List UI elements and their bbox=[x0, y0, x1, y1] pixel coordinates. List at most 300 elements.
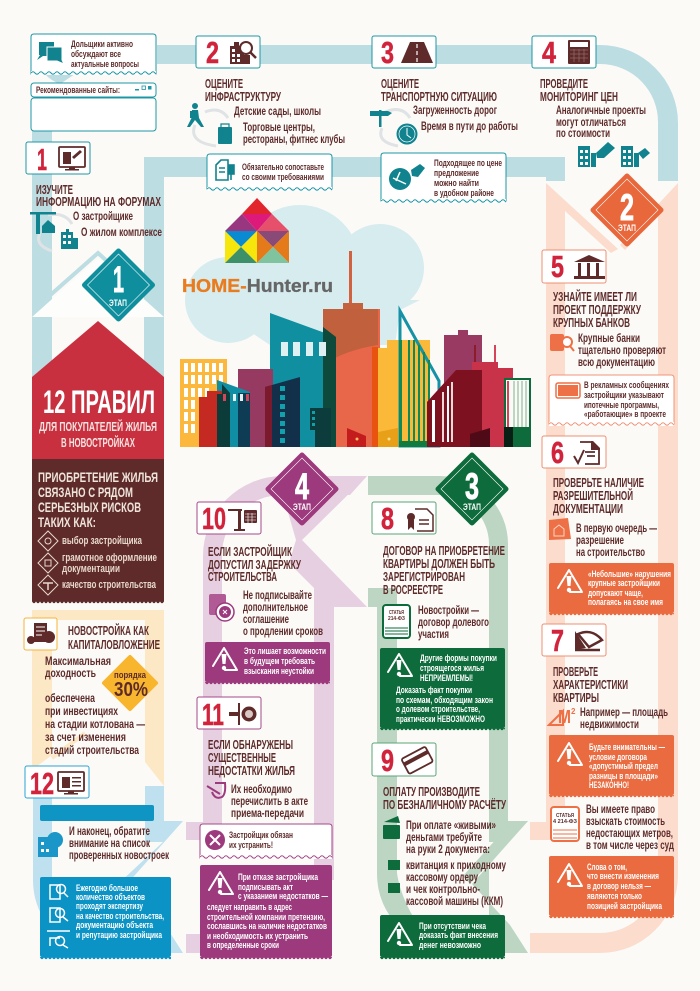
rule 10 text: о продлении сроков bbox=[243, 626, 323, 638]
icon: square metres: 2 bbox=[571, 707, 576, 716]
rule 1 heading: ИЗУЧИТЕ bbox=[36, 183, 73, 197]
investment text bottom: обеспечена bbox=[45, 693, 95, 705]
rule 10 heading: ДОПУСТИЛ ЗАДЕРЖКУ bbox=[208, 558, 301, 572]
rule 9 number box bbox=[372, 743, 436, 778]
icon: document pen bbox=[216, 160, 234, 180]
icon: road bbox=[401, 42, 433, 63]
teal tall building bbox=[270, 313, 336, 447]
title panel red house bbox=[32, 321, 164, 460]
rule 11 bbox=[197, 697, 332, 960]
yellow left building bbox=[180, 359, 227, 447]
investment text bottom: на стадии котлована — bbox=[45, 719, 145, 731]
risks heading: СЕРЬЕЗНЫХ РИСКОВ bbox=[38, 499, 141, 515]
rule 12 bbox=[25, 766, 171, 960]
warning text: полагаясь на свое имя bbox=[588, 597, 663, 607]
warning panel bbox=[549, 856, 674, 919]
stage 4 diamond bbox=[268, 455, 336, 523]
rule 5 heading bbox=[553, 289, 641, 330]
rule 5 heading: ПРОЕКТ ПОДДЕРЖКУ bbox=[553, 303, 641, 317]
maroon building bbox=[238, 369, 273, 447]
risk list: документации bbox=[62, 563, 120, 575]
icon: law article 4 214-FZ: СТАТЬЯ bbox=[556, 813, 574, 819]
rule 3 heading bbox=[381, 77, 497, 104]
icon: warning bbox=[558, 570, 582, 592]
rule 6 heading: ДОКУМЕНТАЦИИ bbox=[553, 502, 623, 516]
icon: road sign bbox=[370, 110, 392, 127]
small red foreground block bbox=[347, 428, 366, 447]
rule 1 number box: 1 bbox=[37, 142, 47, 177]
warning panel bbox=[549, 735, 674, 798]
rule 8 heading: ДОГОВОР НА ПРИОБРЕТЕНИЕ bbox=[383, 544, 505, 558]
rule 8 number box bbox=[372, 501, 436, 536]
rule 3 bbox=[370, 35, 518, 203]
grey cycle arrows bbox=[381, 110, 410, 146]
rights text: взыскать стоимость bbox=[586, 816, 665, 828]
rule 9 text: При оплате «живыми» bbox=[406, 820, 496, 832]
callout text bbox=[434, 158, 502, 198]
rule 11 text: приема-передачи bbox=[231, 808, 304, 820]
rule 8 heading: В РОСРЕЕСТРЕ bbox=[383, 583, 443, 597]
warning text bbox=[587, 862, 663, 911]
callout text bbox=[242, 162, 324, 182]
callout: compare requirements bbox=[207, 154, 332, 191]
callout text: В рекламных сообщениях bbox=[584, 380, 669, 390]
expertise text bbox=[76, 883, 164, 940]
investment text bottom bbox=[45, 693, 145, 757]
rule 1 text: О жилом комплексе bbox=[81, 227, 162, 239]
investment text top: Максимальная bbox=[45, 656, 111, 668]
icon: monitor list bbox=[58, 772, 84, 794]
risk list: грамотное оформление bbox=[62, 552, 157, 564]
warning text: практически НЕВОЗМОЖНО bbox=[396, 714, 485, 724]
rule 6 heading: РАЗРЕШИТЕЛЬНОЙ bbox=[553, 488, 633, 503]
rule 2 heading: ОЦЕНИТЕ bbox=[205, 77, 243, 91]
rule 4 text bbox=[556, 105, 646, 140]
warning text: доказать факт внесения bbox=[419, 930, 498, 940]
rule 11 text bbox=[231, 784, 308, 820]
rule 11 heading: НЕДОСТАТКИ ЖИЛЬЯ bbox=[208, 764, 295, 778]
stage 4 diamond: 4 bbox=[295, 466, 309, 507]
rule 12 text bbox=[69, 826, 169, 862]
stage 4 path band bbox=[186, 476, 367, 953]
rule 8 number box: 8 bbox=[381, 501, 394, 536]
warning text bbox=[419, 921, 498, 950]
icon: warning bbox=[213, 648, 237, 670]
rule 10 text: соглашение bbox=[243, 614, 289, 626]
expertise text: документацию объекта bbox=[76, 920, 154, 930]
rule 6 number box bbox=[542, 435, 606, 470]
callout text: предложение bbox=[434, 168, 479, 178]
title panel red house: В НОВОСТРОЙКАХ bbox=[61, 435, 135, 450]
icon: chat bubbles bbox=[37, 42, 64, 64]
expertise text: количество объектов bbox=[76, 892, 145, 902]
rule 4 heading: МОНИТОРИНГ ЦЕН bbox=[540, 90, 618, 104]
icon: suitcase bbox=[218, 124, 232, 144]
stage 2 diamond: 2 bbox=[620, 187, 634, 228]
rule 10 text bbox=[243, 590, 323, 638]
icon: bank bbox=[574, 255, 605, 279]
investment text bottom: за счет изменения bbox=[45, 732, 126, 744]
rule 8 text: договор долевого bbox=[418, 617, 489, 629]
rule 10 text: дополнительное bbox=[243, 602, 308, 614]
warning text: НЕПРИЕМЛЕМЫ! bbox=[420, 673, 473, 683]
stage 2 diamond bbox=[593, 176, 661, 244]
blue expertise panel bbox=[40, 877, 171, 960]
rule 4 text: Аналогичные проекты bbox=[556, 105, 646, 117]
investment icon box bbox=[24, 618, 57, 650]
icon: monitor bbox=[59, 147, 85, 170]
icon: crane calendar bbox=[228, 509, 257, 531]
warning panel bbox=[549, 563, 674, 616]
rule 1 text: О застройщике bbox=[73, 211, 133, 223]
recommended sites panel bbox=[31, 83, 156, 131]
callout text: их устранить! bbox=[229, 840, 273, 850]
rule 8 heading: ЗАРЕГИСТРИРОВАН bbox=[383, 570, 465, 584]
icon: law article 4 214-FZ: 4 214-ФЗ bbox=[553, 819, 578, 825]
rule 7 heading: КВАРТИРЫ bbox=[553, 691, 599, 705]
icon: walking man bbox=[187, 103, 204, 127]
icon: building bbox=[61, 229, 78, 249]
rule 12 text: внимание на список bbox=[69, 838, 150, 850]
callout text bbox=[229, 830, 293, 850]
rule 6 text: В первую очередь — bbox=[576, 523, 657, 535]
warning text: условие договора bbox=[589, 752, 648, 762]
callout text: в удобном районе bbox=[434, 188, 494, 198]
warning text: взыскания неустойки bbox=[244, 666, 314, 676]
expertise text: проходят экспертизу bbox=[76, 901, 143, 911]
rule 2 bbox=[187, 35, 345, 191]
grey cycle arrows bbox=[38, 214, 72, 251]
rule 8 text: Новостройки — bbox=[418, 605, 479, 617]
warning text: Другие формы покупки bbox=[420, 653, 497, 663]
warning text: Это лишает возможности bbox=[244, 646, 326, 656]
icon: building gear bbox=[38, 832, 63, 857]
warning panel bbox=[205, 642, 330, 685]
rule 12 text: И наконец, обратите bbox=[69, 826, 150, 838]
rule 2 text: Детские сады, школы bbox=[234, 106, 321, 118]
red right building bbox=[427, 345, 513, 447]
investment text top bbox=[45, 656, 111, 680]
stage 1 diamond bbox=[84, 251, 152, 319]
rule 9 heading: ПО БЕЗНАЛИЧНОМУ РАСЧЁТУ bbox=[383, 797, 506, 812]
logo: house mosaic bbox=[225, 198, 289, 263]
icon: bank card bbox=[401, 746, 433, 774]
icon: permit document bbox=[574, 441, 600, 464]
rights text: Вы имеете право bbox=[586, 804, 655, 816]
warning text: допускают чаще, bbox=[588, 588, 643, 598]
rule 7 text bbox=[580, 707, 668, 731]
rule 11 heading: СУЩЕСТВЕННЫЕ bbox=[208, 751, 276, 765]
title panel red house: 12 ПРАВИЛ bbox=[43, 384, 155, 420]
stage 1 diamond: ЭТАП bbox=[109, 298, 127, 309]
risks panel bbox=[32, 459, 164, 604]
rule 12 number box bbox=[25, 766, 89, 801]
rule 11 heading bbox=[208, 738, 295, 778]
warning text: строящегося жилья bbox=[420, 663, 484, 673]
investment panel bbox=[24, 618, 160, 757]
rule 10 text: Не подписывайте bbox=[243, 590, 312, 602]
rule 11 number box bbox=[197, 697, 261, 732]
warning text: крупные застройщики bbox=[588, 578, 660, 588]
rule 4 number box: 4 bbox=[542, 35, 557, 70]
icon: calculator bbox=[568, 40, 590, 64]
rule 7 text: недвижимости bbox=[580, 719, 639, 731]
expertise text: на качество строительства, bbox=[76, 911, 164, 921]
stage 5 blue band bbox=[33, 786, 183, 953]
documents list: кассовому ордеру bbox=[406, 872, 478, 884]
rule 3 text: Время в пути до работы bbox=[421, 121, 518, 133]
striped teal-green building bbox=[399, 311, 441, 447]
rule 5 text bbox=[578, 333, 666, 369]
risk list: качество строительства bbox=[62, 579, 157, 591]
rule 4 text: по стоимости bbox=[556, 128, 610, 140]
rule 9 heading bbox=[383, 785, 506, 812]
rule 10 number box: 10 bbox=[202, 501, 226, 536]
stage 3 diamond: 3 bbox=[465, 466, 479, 507]
grey cycle arrows bbox=[194, 110, 228, 146]
rule 4 heading: ПРОВЕДИТЕ bbox=[540, 77, 588, 91]
rule 7 heading bbox=[553, 665, 628, 705]
rule 2 text: Торговые центры, bbox=[243, 122, 315, 134]
icon: wallet bbox=[383, 816, 400, 839]
forum callout bbox=[31, 34, 156, 75]
risk list: выбор застройщика bbox=[62, 535, 143, 547]
rule 4 heading bbox=[540, 77, 618, 104]
documents list: кассовой машины (ККМ) bbox=[406, 896, 503, 908]
warning text: являются только bbox=[587, 891, 642, 901]
icon: square metres bbox=[549, 707, 576, 727]
icon: receipts bbox=[388, 860, 400, 893]
investment text bottom: при инвестициях bbox=[45, 706, 118, 718]
rule 7 number box: 7 bbox=[551, 623, 564, 658]
callout text: Подходящее по цене bbox=[434, 158, 502, 168]
teal low building bbox=[217, 380, 250, 447]
rule 6 bbox=[542, 435, 674, 616]
icon: magnifier set bbox=[47, 884, 70, 948]
warning text: в будущем требовать bbox=[244, 656, 315, 666]
blue bar bbox=[40, 805, 154, 821]
icon: warning bbox=[388, 923, 412, 945]
stage 2 diamond: ЭТАП bbox=[618, 223, 636, 234]
icon: square metres: М bbox=[558, 707, 571, 727]
dark navy building bbox=[265, 377, 300, 447]
rule 2 number box bbox=[196, 35, 260, 70]
warning text: При отказе застройщика bbox=[238, 872, 319, 882]
stage 3 diamond bbox=[438, 455, 506, 523]
rule 8 text bbox=[418, 605, 489, 641]
rule 2 number box: 2 bbox=[206, 35, 219, 70]
rule 4 text: могут отличаться bbox=[556, 117, 626, 129]
rule 10 number box bbox=[197, 501, 261, 536]
rule 1 heading: ИНФОРМАЦИЮ НА ФОРУМАХ bbox=[36, 195, 161, 209]
warning text: строительной компании претензию, bbox=[207, 912, 325, 922]
warning text: по схемам, обходящим закон bbox=[396, 695, 493, 705]
rule 10 heading: ЕСЛИ ЗАСТРОЙЩИК bbox=[208, 544, 292, 559]
rule 11 text: Их необходимо bbox=[231, 784, 292, 796]
callout: developer must fix bbox=[200, 824, 332, 859]
rule 3 text: Загруженность дорог bbox=[413, 105, 497, 117]
warning text: Будьте внимательны — bbox=[589, 742, 665, 752]
callout text: Застройщик обязан bbox=[229, 830, 293, 840]
stage 4 diamond: ЭТАП bbox=[293, 502, 311, 513]
rule 1 bbox=[26, 142, 162, 251]
rule 5 number box bbox=[542, 249, 606, 284]
rule 2 heading bbox=[205, 77, 281, 104]
callout text: «работающие» в проекте bbox=[584, 409, 666, 419]
rule 5 heading: КРУПНЫХ БАНКОВ bbox=[553, 316, 630, 330]
stage 1 path band bbox=[32, 45, 678, 380]
rule 11 text: перечислить в акте bbox=[231, 796, 308, 808]
icon: clock bbox=[396, 124, 418, 144]
warning text: и необходимость их устранить bbox=[207, 931, 308, 941]
warning text: в договор нельзя — bbox=[587, 881, 651, 891]
stage 1 diamond: 1 bbox=[113, 259, 124, 300]
green right building bbox=[504, 379, 531, 447]
forum text bbox=[71, 39, 139, 69]
forum text: актуальные вопросы bbox=[71, 59, 139, 69]
rule 2 heading: ИНФРАСТРУКТУРУ bbox=[205, 90, 281, 104]
risks heading bbox=[38, 469, 158, 530]
city skyline bbox=[180, 251, 531, 447]
recommended sites panel: Рекомендованные сайты: bbox=[36, 85, 120, 95]
warning text bbox=[588, 569, 671, 607]
icon: document magnifier bbox=[550, 334, 574, 351]
callout: mortgage ads bbox=[549, 375, 674, 426]
rule 7 bbox=[542, 623, 674, 919]
rule 5 bbox=[542, 249, 674, 426]
warning text: сославшись на наличие недостатков bbox=[207, 921, 327, 931]
callout text: со своими требованиями bbox=[242, 172, 324, 182]
callout: price in district bbox=[381, 153, 506, 203]
warning text: Доказать факт покупки bbox=[396, 685, 472, 695]
forum text: Дольщики активно bbox=[71, 39, 133, 49]
rule 6 text bbox=[576, 523, 657, 559]
rule 6 text: разрешение bbox=[576, 535, 624, 547]
rule 11 number box: 11 bbox=[202, 697, 224, 732]
rule 12 number box: 12 bbox=[30, 766, 54, 801]
warning text: денег невозможно bbox=[419, 940, 481, 950]
risks heading: ПРИОБРЕТЕНИЕ ЖИЛЬЯ bbox=[38, 469, 158, 485]
rule 1 heading bbox=[36, 183, 161, 209]
stage 3 diamond: ЭТАП bbox=[463, 502, 481, 513]
warning text: подписывать акт bbox=[238, 882, 293, 892]
rule 7 heading: ХАРАКТЕРИСТИКИ bbox=[553, 678, 628, 692]
risks heading: СВЯЗАНО С РЯДОМ bbox=[38, 484, 133, 500]
warning panel bbox=[380, 648, 505, 731]
investment text bottom: стадий строительства bbox=[45, 745, 139, 757]
expertise text: Ежегодно большое bbox=[76, 883, 138, 893]
capital investment band bbox=[32, 610, 164, 786]
maroon right building bbox=[444, 330, 482, 447]
callout text: можно найти bbox=[434, 178, 479, 188]
icon: crane bbox=[30, 212, 56, 234]
rule 3 number box: 3 bbox=[381, 35, 394, 70]
red left building bbox=[199, 391, 222, 447]
warning text bbox=[207, 872, 328, 950]
investment heading: КАПИТАЛОВЛОЖЕНИЕ bbox=[68, 638, 160, 652]
rule 7 heading: ПРОВЕРЬТЕ bbox=[553, 665, 598, 679]
rule 9 heading: ОПЛАТУ ПРОИЗВОДИТЕ bbox=[383, 785, 480, 799]
icon: law article 214-FZ: 214-ФЗ bbox=[388, 616, 405, 622]
rule 4 bbox=[532, 35, 650, 167]
warning text: что внести изменения bbox=[587, 871, 659, 881]
rule 6 number box: 6 bbox=[551, 435, 564, 470]
rule 5 text: всю документацию bbox=[578, 357, 655, 369]
icon: hand list bbox=[207, 783, 225, 798]
icon: law article 214-FZ bbox=[383, 605, 410, 638]
rule 5 number box: 5 bbox=[551, 249, 564, 284]
rule 10 heading: СТРОИТЕЛЬСТВА bbox=[208, 570, 277, 584]
30 percent badge: 30% bbox=[114, 679, 148, 701]
forum text: обсуждают все bbox=[71, 49, 121, 59]
stage 2 path band bbox=[530, 183, 678, 953]
rule 2 text bbox=[234, 106, 345, 146]
rule 3 heading: ОЦЕНИТЕ bbox=[381, 77, 419, 91]
warning panel bbox=[380, 915, 505, 960]
rule 10 bbox=[197, 501, 330, 685]
investment text top: доходность bbox=[45, 668, 96, 680]
icon: billboard bbox=[556, 383, 580, 398]
warning text: позицией застройщика bbox=[587, 901, 663, 911]
warning text: в определенные сроки bbox=[207, 940, 279, 950]
documents list bbox=[406, 860, 506, 908]
rule 11 heading: ЕСЛИ ОБНАРУЖЕНЫ bbox=[208, 738, 293, 752]
callout text: Обязательно сопоставьте bbox=[242, 162, 324, 172]
icon: apartment plan bbox=[575, 631, 602, 650]
rule 3 heading: ТРАНСПОРТНУЮ СИТУАЦИЮ bbox=[381, 90, 497, 104]
title panel red house: ДЛЯ ПОКУПАТЕЛЕЙ ЖИЛЬЯ bbox=[39, 419, 157, 434]
rule 9 text bbox=[406, 820, 496, 856]
icon: warning bbox=[558, 864, 582, 886]
warning text: с указанием недостатков — bbox=[238, 891, 328, 901]
warning panel bbox=[200, 865, 332, 960]
rule 8 heading bbox=[383, 544, 505, 597]
rule 10 heading bbox=[208, 544, 301, 584]
icon: tools bbox=[205, 830, 225, 850]
icon: warning bbox=[209, 872, 233, 894]
icon: building magnifier bbox=[230, 42, 256, 64]
rule 9 text: на руки 2 документа: bbox=[406, 844, 490, 856]
callout text: застройщики указывают bbox=[584, 390, 664, 400]
icon: defect bbox=[229, 703, 256, 725]
icon: permit house bbox=[549, 518, 571, 540]
risk list bbox=[62, 535, 157, 591]
30 percent badge: порядка bbox=[114, 670, 147, 680]
warning text: При отсутствии чека bbox=[419, 921, 487, 931]
icon: compass tag bbox=[389, 164, 425, 190]
icon: warning bbox=[388, 654, 412, 676]
rule 7 number box bbox=[542, 623, 606, 658]
rule 12 text: проверенных новостроек bbox=[69, 850, 169, 862]
rule 1 text bbox=[73, 211, 162, 239]
expertise text: и репутацию застройщика bbox=[76, 930, 163, 940]
warning text: НЕЗАКОННО! bbox=[589, 780, 629, 790]
rule 6 heading bbox=[553, 476, 644, 516]
rule 3 number box bbox=[372, 35, 436, 70]
rule 3 text bbox=[413, 105, 518, 133]
rule 2 text: рестораны, фитнес клубы bbox=[243, 134, 345, 146]
rule 9 text: деньгами требуйте bbox=[406, 832, 482, 844]
warning text bbox=[589, 742, 665, 790]
icon: buildings with price tags bbox=[578, 142, 650, 167]
callout text bbox=[584, 380, 669, 419]
rule 5 heading: УЗНАЙТЕ ИМЕЕТ ЛИ bbox=[553, 289, 637, 304]
icon: risk diamonds bbox=[38, 531, 58, 595]
warning text: «допустимый предел bbox=[589, 761, 658, 771]
callout text: ипотечные программы, bbox=[584, 400, 659, 410]
30 percent badge bbox=[104, 657, 156, 709]
icon: document rejected bbox=[209, 594, 234, 621]
